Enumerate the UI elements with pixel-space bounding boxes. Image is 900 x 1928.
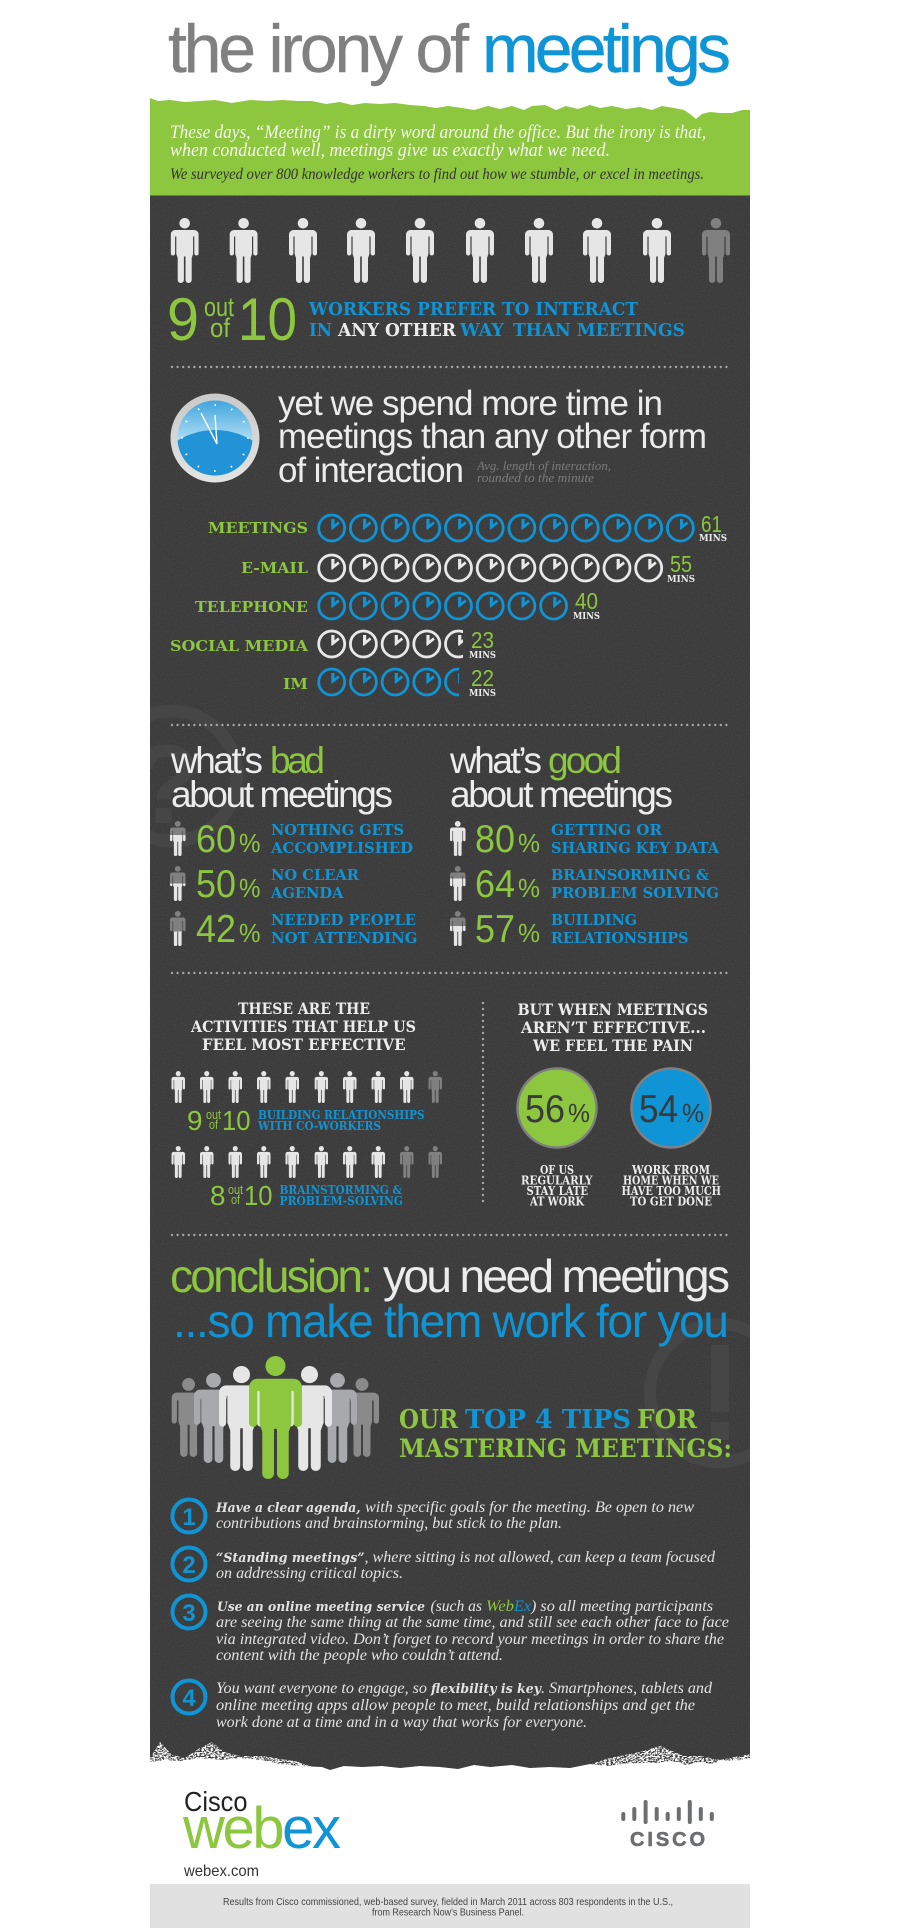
footer: source note [150,1884,750,1928]
heading: pain: AREN’T EFFECTIVE... [520,1018,706,1037]
row: e-mail 55 mins: E-MAIL [241,559,308,577]
stat: 50 percent: % [239,873,260,903]
panel: effective activities [172,999,442,1211]
tip 4: online meeting apps allow people to meet, build relationships and get the [216,1696,695,1714]
row: im 22 mins: IM [283,675,308,693]
stat: 9 out of 10 building relationships: WITH CO-WORKERS [257,1119,381,1133]
row: meetings 61 mins: MINS [699,534,727,544]
stat: 64 percent: 64 [475,863,515,906]
heading: conclusion [170,1250,730,1347]
panel: what's bad [170,740,418,951]
link: webex.com: webex.com [183,1863,259,1880]
caption: work from home: HOME WHEN WE [623,1174,719,1188]
stat circle: 56 percent: 56 [525,1088,565,1131]
heading: yet we spend: yet we spend more time in [278,384,663,423]
row: meetings 61 mins: MEETINGS [208,519,308,537]
panel: feeling the pain [518,1000,721,1208]
heading: conclusion: you need meetings [383,1250,730,1302]
tip 2: “Standing meetings” [216,1551,364,1566]
stat: 64 percent [450,863,719,906]
tip 3: ) so all meeting participants [530,1597,713,1615]
stat: 60 percent [170,818,413,861]
row: e-mail 55 mins [241,551,695,585]
note: avg length: Avg. length of interaction, [476,458,611,473]
icon: large clock [170,394,260,482]
stat: 80 percent: SHARING KEY DATA [551,839,719,857]
stat: 9 out of 10 building relationships: 9 [187,1105,202,1136]
tip 3: Ex [513,1597,532,1615]
heading: what's bad: about meetings [171,774,393,815]
heading: top 4 tips: TOP 4 TIPS [465,1405,631,1435]
stat: 9 out of 10 [167,286,297,353]
heading: yet we spend [278,384,707,490]
caption: work from home: WORK FROM [631,1163,710,1177]
tip 4 [172,1679,713,1731]
panel: green intro [150,98,750,197]
row: telephone 40 mins [195,588,600,622]
tip 3: Web [486,1597,514,1615]
stat circle: 54 percent: % [682,1098,704,1128]
people row: 9 of 10 small [172,1071,442,1103]
people row: 9 of 10 [171,218,730,283]
tip 2: 2 [182,1552,196,1579]
tip 1: 1 [182,1504,196,1531]
heading: pain: WE FEEL THE PAIN [532,1036,693,1055]
headline: workers prefer: WORKERS PREFER TO INTERACT [308,299,639,320]
heading: activities: FEEL MOST EFFECTIVE [202,1035,406,1054]
stat: 42 percent: 42 [196,908,236,951]
heading: activities: ACTIVITIES THAT HELP US [190,1017,416,1036]
heading: what's bad [170,740,393,815]
stat: 57 percent: % [518,918,540,948]
tip 3: via integrated video. Don’t forget to record your meetings in order to share the [216,1630,724,1648]
stat circle: 54 percent: 54 [639,1088,678,1131]
panel: dark background [150,196,750,1770]
tip 3 [172,1596,729,1664]
title [168,11,731,87]
caption: stay late: OF US [540,1163,574,1177]
tip 4: flexibility is key [430,1682,542,1697]
heading: what's good: good [548,740,622,781]
stat circle: 54 percent [632,1068,710,1148]
stat: 42 percent: NOT ATTENDING [271,929,418,947]
heading: what's good: what’s [449,740,542,781]
caption: stay late: REGULARLY [521,1174,593,1188]
headline: workers prefer: WAY [459,320,505,341]
row: e-mail 55 mins: MINS [667,575,695,585]
heading: top 4 tips [399,1405,732,1463]
stat: 42 percent [170,908,418,951]
heading: pain: BUT WHEN MEETINGS [518,1000,708,1019]
note: avg length [476,458,611,485]
tip 4: work done at a time and in a way that works for everyone. [216,1713,587,1731]
heading: activities: THESE ARE THE [238,999,370,1018]
heading: what's good: about meetings [450,774,673,815]
heading: conclusion: ...so make them work for you [173,1295,729,1347]
people row: 8 of 10 small [172,1146,442,1178]
heading: top 4 tips: MASTERING MEETINGS: [399,1434,732,1463]
caption: work from home: TO GET DONE [630,1194,712,1208]
caption: work from home: HAVE TOO MUCH [622,1184,721,1198]
stat: 8 out of 10 brainstorming: 10 [244,1180,272,1211]
stat: 9 out of 10: out [204,292,234,322]
stat: 57 percent [450,908,688,951]
stat: 64 percent: % [518,873,540,903]
logo: cisco: CISCO [630,1829,705,1851]
tip 3: Use an online meeting service [217,1600,425,1615]
heading: top 4 tips: FOR [637,1405,697,1435]
stat: 8 out of 10 brainstorming: of [231,1192,240,1207]
note: avg length: rounded to the minute [477,470,594,485]
stat: 60 percent: 60 [196,818,236,861]
watermark: question mark: ? [132,722,200,847]
heading: activities [190,999,416,1054]
watermark: question mark [150,704,244,848]
tip 4: You want everyone to engage, so [216,1679,427,1697]
tip 2: on addressing critical topics. [216,1564,403,1582]
tip 1 [172,1498,694,1532]
row: social media 23 mins: MINS [469,651,496,661]
stat: 42 percent: NEEDED PEOPLE [271,911,416,929]
row: e-mail 55 mins: 55 [670,551,692,577]
caption: stay late [521,1163,593,1208]
stat: 50 percent: NO CLEAR [271,866,360,884]
stat: 9 out of 10: of [210,313,230,343]
row: social media 23 mins: SOCIAL MEDIA [170,637,308,655]
logo: cisco webex: Cisco [184,1786,248,1817]
stat: 8 out of 10 brainstorming: PROBLEM-SOLVING [280,1194,403,1208]
stat: 9 out of 10 building relationships: out [206,1107,221,1122]
heading: conclusion: conclusion: [170,1250,373,1302]
logo: cisco [623,1802,712,1851]
stat: 60 percent: ACCOMPLISHED [270,839,413,857]
tip 1: Have a clear agenda, [215,1501,360,1516]
stat: 80 percent [450,818,719,861]
headline: workers prefer: THAN MEETINGS [513,320,685,341]
row: social media 23 mins: 23 [471,627,494,653]
caption: work from home [622,1163,721,1208]
intro text [170,123,706,183]
stat: 60 percent: NOTHING GETS [271,821,404,839]
stat: 42 percent: % [239,918,260,948]
stat: 64 percent: PROBLEM SOLVING [551,884,719,902]
heading: yet we spend: meetings than any other form [278,417,707,456]
stat circle: 56 percent: % [568,1098,590,1128]
tip 3: are seeing the same thing at the same time, and still see each other face to face [216,1613,729,1631]
tip 2: , where sitting is not allowed, can keep a team focused [364,1548,716,1566]
heading: what's bad: what’s [170,740,263,781]
row: telephone 40 mins: MINS [573,612,600,622]
logo: cisco webex: webex [182,1796,341,1861]
stat: 9 out of 10 building relationships [187,1105,424,1136]
speckled torn edge left [150,1742,320,1770]
stat circle: 56 percent [518,1068,596,1148]
stat: 80 percent: 80 [475,818,515,861]
heading: pain [518,1000,708,1055]
panel: what's good [449,740,719,951]
tip 4: 4 [182,1685,196,1712]
footer: source note: from Research Now’s Business Panel. [372,1906,524,1918]
row: social media 23 mins [171,630,496,658]
stat: 8 out of 10 brainstorming: out [228,1182,243,1197]
title: the irony of [168,11,469,87]
stat: 8 out of 10 brainstorming [210,1180,403,1211]
footer: source note: Results from Cisco commissioned, web-based survey, fielded in March 2011 across 803 respondents in the U.S., [223,1896,673,1908]
caption: stay late: STAY LATE [526,1184,588,1198]
title: meetings [482,11,731,87]
heading: top 4 tips: OUR [399,1405,458,1435]
row: im 22 mins: 22 [471,665,494,691]
stat: 57 percent: RELATIONSHIPS [551,929,688,947]
row: meetings 61 mins: 61 [701,511,722,537]
heading: what's good [449,740,673,815]
stat: 64 percent: BRAINSORMING & [551,866,709,884]
icon: group of people [172,1356,379,1479]
heading: what's bad: bad [270,740,325,781]
intro text: when conducted well, meetings give us exactly what we need. [170,141,610,161]
stat: 9 out of 10 building relationships: 10 [222,1105,250,1136]
stat: 60 percent: % [239,828,260,858]
row: im 22 mins: MINS [469,689,496,699]
tip 3: (such as [430,1597,482,1615]
stat: 57 percent: 57 [475,908,515,951]
intro text: These days, “Meeting” is a dirty word around the office. But the irony is that, [170,123,706,143]
stat: 9 out of 10: 9 [167,286,199,353]
row: im 22 mins [284,668,496,696]
stat: 80 percent: GETTING OR [551,821,663,839]
heading: yet we spend: of interaction [278,451,464,490]
row: meetings 61 mins [208,511,727,544]
speckled torn edge right [590,1746,750,1766]
tip 4: . Smartphones, tablets and [541,1679,713,1697]
stat: 8 out of 10 brainstorming: 8 [210,1180,226,1211]
tip 1: with specific goals for the meeting. Be open to new [365,1498,694,1516]
stat: 8 out of 10 brainstorming: BRAINSTORMING & [280,1183,402,1197]
watermark: exclamation mark [644,1318,750,1468]
stat: 50 percent [170,863,360,906]
intro text: We surveyed over 800 knowledge workers to find out how we stumble, or excel in meetings. [170,166,704,183]
stat: 50 percent: AGENDA [270,884,344,902]
stat: 50 percent: 50 [196,863,236,906]
headline: workers prefer: ANY OTHER [337,320,457,341]
stat: 9 out of 10 building relationships: of [209,1117,218,1132]
tip 3: content with the people who couldn’t attend. [216,1646,503,1664]
tip 1: contributions and brainstorming, but stick to the plan. [216,1514,562,1532]
stat: 9 out of 10 building relationships: BUILDING RELATIONSHIPS [258,1108,424,1122]
headline: workers prefer: IN [309,320,332,341]
caption: stay late: AT WORK [529,1194,584,1208]
tip 3: 3 [182,1600,196,1627]
headline: workers prefer [308,299,685,341]
stat: 57 percent: BUILDING [551,911,637,929]
row: telephone 40 mins: TELEPHONE [195,598,308,616]
stat: 80 percent: % [518,828,540,858]
stat: 9 out of 10: 10 [238,286,297,353]
row: telephone 40 mins: 40 [575,588,598,614]
tip 2 [172,1548,716,1582]
